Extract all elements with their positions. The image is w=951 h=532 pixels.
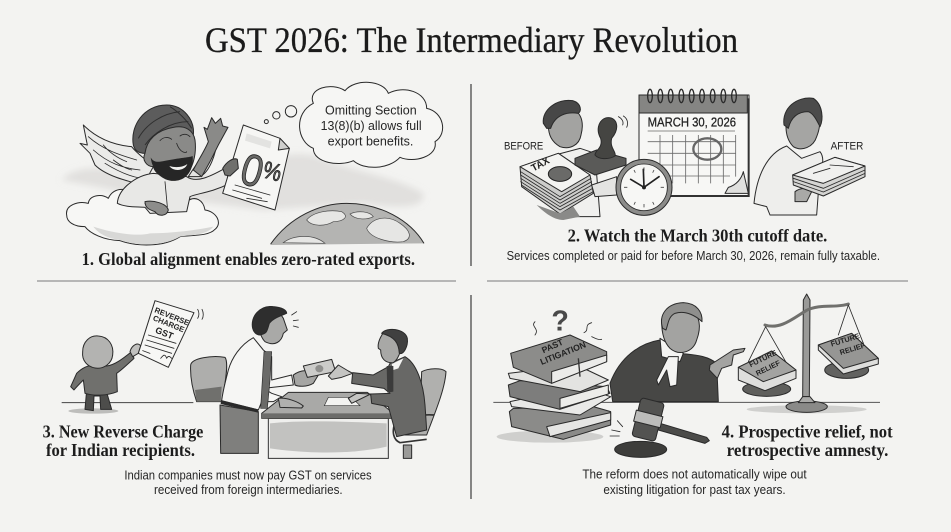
panel: prospective relief	[493, 294, 893, 497]
heading	[722, 421, 893, 460]
icon: balance scales: FUTURE	[830, 331, 861, 349]
icon: reverse charge notice: CHARGE	[152, 314, 186, 334]
icon: person after	[754, 98, 823, 215]
label: before: BEFORE	[504, 140, 544, 152]
icon: reverse charge notice	[138, 301, 203, 367]
icon: cash	[303, 359, 336, 377]
icon: reverse charge notice: REVERSE	[153, 306, 191, 328]
icon: right wing	[188, 142, 217, 177]
label: after: AFTER	[831, 140, 863, 152]
icon: reverse charge notice: GST	[154, 325, 175, 341]
callout text: 13(8)(b) allows full	[321, 119, 422, 133]
panel: global alignment	[62, 82, 443, 269]
icon: stack of past litigation books: LITIGATION	[539, 339, 587, 367]
icon: calendar	[639, 89, 749, 196]
icon: clean paper stack	[793, 157, 865, 196]
icon: raised arm and waving hand	[193, 118, 228, 177]
icon: hand holding stack	[592, 177, 617, 197]
icon: hand on cloud	[145, 201, 168, 215]
icon: balance scales: FUTURE	[748, 348, 778, 369]
icon: seated man	[328, 329, 427, 437]
icon: left chair	[191, 357, 227, 402]
heading: 4. Prospective relief, not	[722, 421, 893, 441]
icon: desk	[262, 392, 393, 458]
body text: Services completed or paid for before March 30, 2026, remain fully taxable.	[507, 249, 880, 263]
icon: paper stack with tax stamp	[520, 153, 593, 220]
icon: stack of past litigation books: PAST	[540, 337, 565, 355]
icon: 0% document	[223, 125, 289, 210]
icon: clock	[616, 159, 672, 215]
icon: kurta	[117, 168, 230, 213]
heading: for Indian recipients.	[46, 440, 195, 460]
icon: balance scales	[738, 294, 878, 412]
icon: balance scales: RELIEF	[839, 341, 867, 357]
title: GST 2026: The Intermediary Revolution	[205, 20, 738, 60]
icon: hand holding document	[223, 159, 238, 176]
heading: 2. Watch the March 30th cutoff date.	[568, 226, 827, 246]
icon: face and beard	[144, 127, 195, 181]
illustration: judge, litigation books, scales and gavel	[493, 294, 880, 457]
callout text: export benefits.	[328, 134, 413, 148]
icon: thought dots	[264, 106, 297, 124]
icon: right chair	[393, 369, 446, 458]
body text: The reform does not automatically wipe out	[582, 468, 807, 482]
icon: balance scales: RELIEF	[754, 358, 782, 378]
body text	[582, 468, 807, 497]
panel: reverse charge	[43, 301, 446, 497]
icon: globe	[270, 203, 424, 245]
icon: rubber stamp	[575, 116, 628, 175]
callout: thought bubble shape	[300, 82, 443, 167]
body text: Indian companies must now pay GST on services	[124, 468, 372, 482]
icon: left wing	[80, 125, 153, 185]
heading: 1. Global alignment enables zero-rated exports.	[82, 249, 415, 269]
icon: 0% document: 0	[235, 143, 269, 198]
callout text: Omitting Section	[325, 103, 417, 117]
icon: judge	[610, 303, 745, 402]
illustration: angel with zero-rated document above globe	[62, 82, 443, 245]
icon: question mark: ?	[551, 306, 569, 338]
callout text	[321, 103, 422, 148]
heading: retrospective amnesty.	[727, 440, 888, 460]
panel: march 30th cutoff	[504, 89, 880, 263]
body text	[124, 468, 372, 497]
icon: paper stack with tax stamp: TAX	[530, 155, 552, 174]
icon: person before	[543, 100, 600, 217]
icon: gavel	[610, 397, 709, 457]
icon: cloud	[67, 189, 218, 245]
icon: standing man	[220, 307, 318, 453]
icon: turban	[133, 105, 193, 153]
icon: stack of past litigation books	[508, 335, 611, 439]
icon: small man	[71, 336, 141, 411]
body text: received from foreign intermediaries.	[154, 483, 343, 497]
icon: 0% document: %	[260, 156, 285, 187]
heading	[43, 421, 203, 460]
calendar date: MARCH 30, 2026	[648, 115, 736, 130]
illustration: before and after calendar scene	[520, 89, 865, 220]
body text: existing litigation for past tax years.	[603, 483, 786, 497]
illustration: office payment scene	[62, 301, 446, 458]
heading: 3. New Reverse Charge	[43, 421, 203, 441]
